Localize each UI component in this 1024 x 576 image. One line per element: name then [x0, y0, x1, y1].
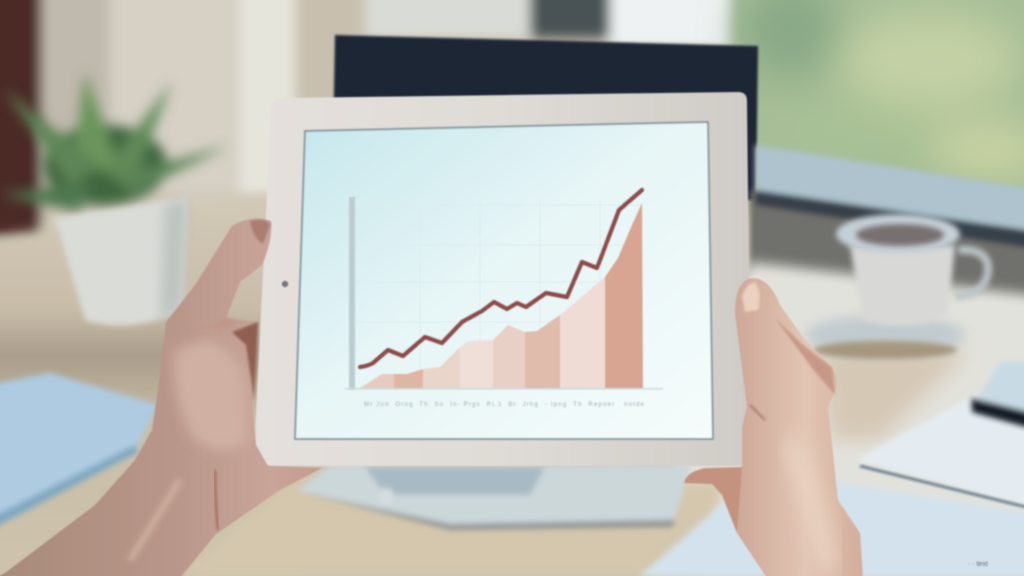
- window sill and dark wall: [750, 145, 1024, 310]
- coffee cup and saucer: [805, 214, 988, 359]
- right hand: [684, 278, 863, 576]
- left hand with forearm: [0, 219, 322, 576]
- blurred text on paper: · · text: [968, 561, 988, 568]
- thumb nail and shading: [250, 220, 270, 244]
- hand body: [735, 278, 863, 576]
- paper and notebook on right desk: [640, 395, 1024, 576]
- x axis labels: Mr Jun Orog Th Su In- Prgs Rt.1 Br Jrhg - Ipng Th Repoer notde: [364, 402, 645, 408]
- y axis: [349, 197, 355, 390]
- desk surface: [0, 195, 1024, 576]
- laptop behind tablet: [332, 35, 758, 200]
- chart gridlines: [354, 200, 640, 388]
- camera dot: [282, 281, 288, 287]
- tablet: [254, 92, 751, 466]
- screen: [295, 122, 713, 439]
- laptop base beneath tablet: [298, 465, 692, 530]
- finger nail: [742, 283, 760, 312]
- plant leaves: [0, 72, 228, 212]
- x axis: [345, 388, 663, 390]
- finger ridge shading: [775, 318, 835, 395]
- stacked area segments: [360, 203, 643, 388]
- cup handle: [955, 250, 988, 296]
- phone on desk: [972, 362, 1024, 428]
- cup rim: [836, 214, 960, 254]
- tablet bezel: [254, 92, 751, 466]
- growth trend line: [360, 190, 642, 367]
- plant pot: [55, 198, 187, 326]
- palm and forearm: [0, 219, 322, 576]
- cup body: [850, 245, 955, 326]
- blue notebook on left desk: [0, 373, 158, 530]
- potted plant: [0, 72, 228, 326]
- line and area chart: [345, 190, 663, 408]
- back finger behind tablet: [684, 467, 750, 533]
